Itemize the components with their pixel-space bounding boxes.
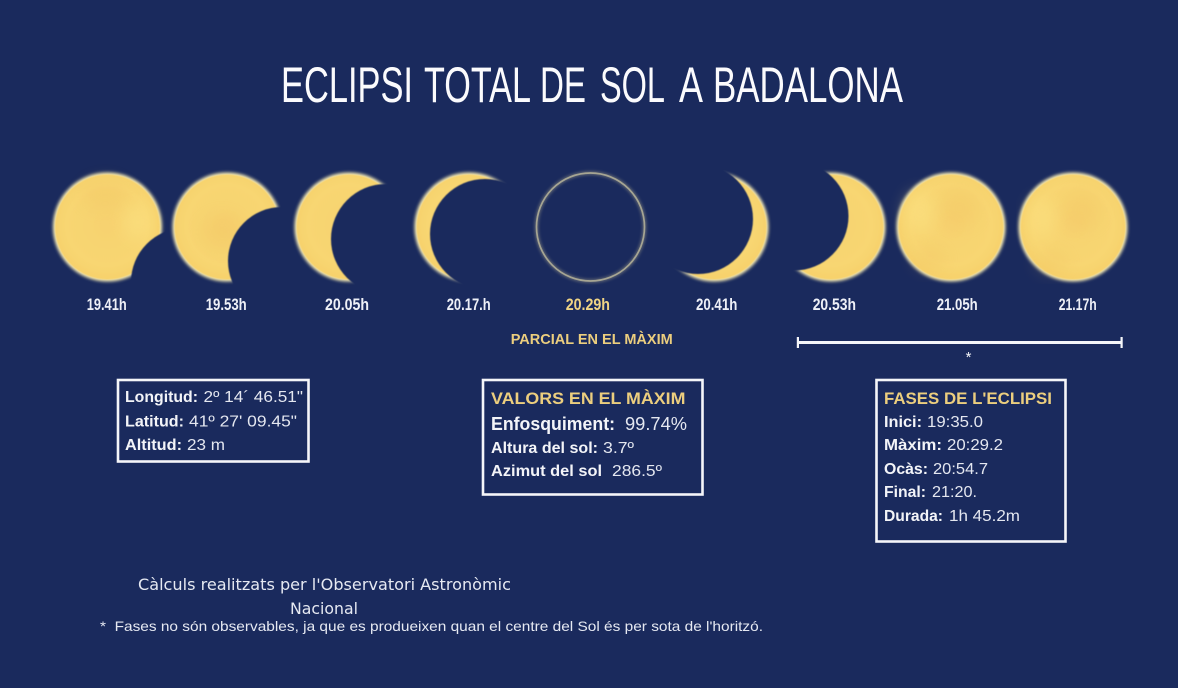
- longitude: 2º 14´ 46.51": [204, 389, 303, 406]
- duration: Durada:: [884, 508, 943, 525]
- credit text: [138, 575, 511, 618]
- time labels: 20.29h: [566, 295, 610, 314]
- heading: VALORS EN EL MÀXIM: [491, 389, 686, 408]
- sun phase 19.53h: [172, 172, 282, 282]
- sun altitude: 3.7º: [603, 440, 634, 457]
- sun phase 19.41h: [53, 172, 162, 282]
- sun phase 21.05h: [896, 172, 1006, 282]
- credit text: Nacional: [290, 599, 358, 618]
- title: SOL: [600, 57, 665, 113]
- end: Final:: [884, 484, 926, 501]
- sun phase 20.29h maximum ring: [536, 173, 644, 281]
- duration: 1h 45.2m: [949, 508, 1020, 525]
- time labels: 19.41h: [87, 295, 127, 314]
- title: ECLIPSI: [281, 57, 413, 113]
- longitude: Longitud:: [125, 389, 198, 406]
- start: Inici:: [884, 414, 922, 431]
- maximum: [884, 437, 1003, 454]
- start: [884, 414, 983, 431]
- longitude: [125, 389, 303, 406]
- sun altitude: Altura del sol:: [491, 440, 598, 457]
- panel: eclipse phases: [876, 380, 1066, 542]
- range bracket for unobservable phases: *: [966, 349, 972, 366]
- sun azimuth: [491, 463, 662, 480]
- panel: values at maximum: [483, 380, 702, 494]
- altitude: [125, 437, 225, 454]
- sunset: [884, 461, 988, 478]
- credit text: Càlculs realitzats per l'Observatori Astronòmic: [138, 575, 511, 594]
- title: [281, 57, 903, 113]
- end: [884, 484, 977, 501]
- footnote: * Fases no són observables, ja que es produeixen quan el centre del Sol és per sota de l'horitzó.: [100, 618, 763, 634]
- sun phase 20.53h: [794, 170, 888, 284]
- time labels: 20.53h: [813, 295, 856, 314]
- time labels: [87, 295, 1097, 314]
- sun azimuth: 286.5º: [612, 463, 662, 480]
- title: TOTAL: [424, 57, 531, 113]
- time labels: 21.05h: [937, 295, 978, 314]
- range bracket for unobservable phases: [797, 337, 1123, 366]
- maximum: Màxim:: [884, 437, 942, 454]
- latitude: [125, 414, 297, 430]
- title: DE: [540, 57, 586, 113]
- sunset: Ocàs:: [884, 461, 928, 478]
- altitude: 23 m: [187, 437, 225, 454]
- title: A: [679, 57, 703, 113]
- obscuration: [491, 414, 687, 434]
- time labels: 20.17.h: [447, 295, 491, 314]
- sun azimuth: Azimut del sol: [491, 463, 602, 480]
- latitude: 41º 27' 09.45": [189, 414, 297, 430]
- duration: [884, 508, 1020, 525]
- sunset: 20:54.7: [933, 461, 988, 478]
- time labels: 21.17h: [1059, 295, 1097, 314]
- sun phase 20.41h: [677, 171, 771, 284]
- heading: FASES DE L'ECLIPSI: [884, 389, 1052, 408]
- start: 19:35.0: [927, 414, 983, 431]
- eclipse sequence: [53, 172, 1128, 282]
- panel: location: [118, 380, 308, 462]
- time labels: 20.05h: [325, 295, 369, 314]
- sun phase 21.17h: [1018, 172, 1128, 282]
- time labels: 20.41h: [696, 295, 737, 314]
- obscuration: 99.74%: [625, 414, 687, 434]
- latitude: Latitud:: [125, 414, 184, 430]
- sun phase 20.17h: [412, 170, 504, 284]
- time labels: 19.53h: [206, 295, 247, 314]
- maximum label: PARCIAL EN EL MÀXIM: [511, 331, 673, 348]
- maximum: 20:29.2: [947, 437, 1003, 454]
- altitude: Altitud:: [125, 437, 182, 454]
- title: BADALONA: [713, 57, 903, 113]
- sun phase 20.05h: [294, 172, 404, 282]
- obscuration: Enfosquiment:: [491, 414, 615, 434]
- end: 21:20.: [932, 484, 977, 501]
